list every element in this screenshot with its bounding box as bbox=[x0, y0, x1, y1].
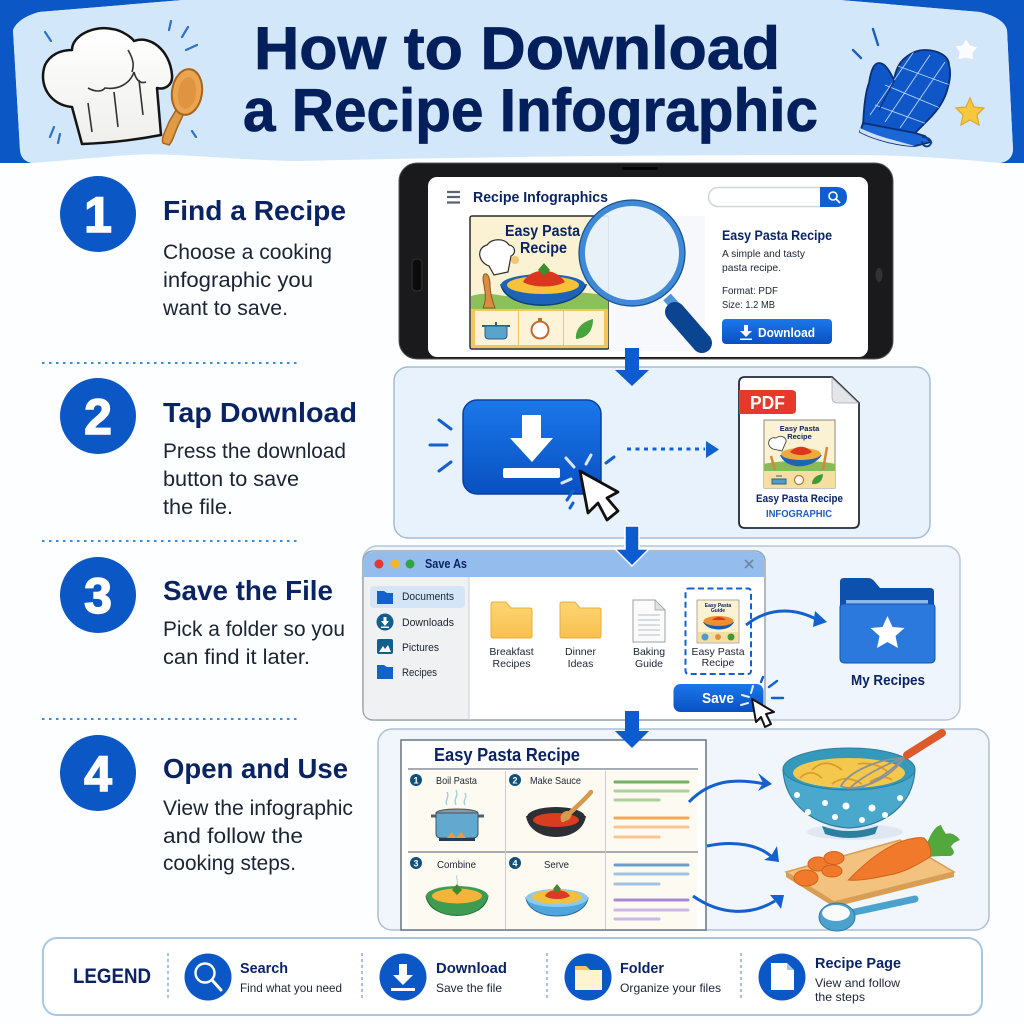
cell: serve: Serve bbox=[544, 859, 569, 871]
arrow to bowl bbox=[689, 773, 772, 802]
step 2 text: the file. bbox=[163, 496, 233, 519]
recipe sheet bbox=[401, 740, 706, 930]
cell: combine bbox=[410, 857, 488, 916]
folder: dinner ideas: Dinner bbox=[565, 646, 596, 658]
curved arrow bbox=[746, 611, 827, 627]
save button bbox=[674, 684, 764, 712]
file: baking guide: Guide bbox=[635, 658, 663, 670]
legend: LEGEND bbox=[73, 965, 151, 988]
icon: cursor bbox=[580, 471, 618, 520]
recipe details: pasta recipe. bbox=[722, 262, 781, 274]
icon: chef hat and spoon bbox=[43, 21, 205, 145]
legend: search bbox=[184, 954, 342, 1000]
dotted arrow bbox=[627, 441, 719, 458]
step 4 text: 4 bbox=[84, 746, 112, 802]
folder: dinner ideas: Ideas bbox=[568, 658, 593, 670]
step 2 text: Press the download bbox=[163, 440, 346, 463]
mini infographic: Recipe bbox=[787, 432, 812, 441]
selected file: easy pasta recipe: Recipe bbox=[702, 657, 735, 669]
legend: download bbox=[380, 954, 507, 1000]
sidebar bbox=[370, 586, 465, 679]
legend: recipe page bbox=[758, 954, 901, 1004]
panel: tap download bbox=[394, 367, 930, 538]
step 3 text bbox=[60, 557, 345, 669]
measuring spoon bbox=[819, 899, 915, 931]
click sparks bbox=[430, 420, 614, 508]
title: a Recipe Infographic bbox=[243, 77, 818, 144]
folder: dinner ideas bbox=[560, 602, 601, 670]
click sparks bbox=[761, 677, 783, 698]
legend: download: Save the file bbox=[436, 981, 502, 995]
icon: menu bbox=[447, 192, 460, 202]
step 3 text: Pick a folder so you bbox=[163, 618, 345, 641]
title: How to Download bbox=[254, 15, 780, 82]
legend: search: Find what you need bbox=[240, 981, 342, 995]
legend: folder bbox=[564, 954, 721, 1000]
step 4 text bbox=[60, 735, 353, 875]
recipe details: Format: PDF bbox=[722, 285, 778, 297]
legend: search: Search bbox=[240, 960, 288, 977]
step 1 text: 1 bbox=[84, 187, 112, 243]
download button: Download bbox=[758, 325, 815, 340]
icon: magnifying glass bbox=[579, 200, 705, 351]
folder: breakfast recipes: Breakfast bbox=[489, 646, 534, 658]
arrow to spoon bbox=[693, 895, 784, 911]
folder: my recipes: My Recipes bbox=[851, 673, 925, 689]
recipe details: Size: 1.2 MB bbox=[722, 299, 775, 311]
step 3 text: can find it later. bbox=[163, 646, 310, 669]
sidebar: Documents bbox=[402, 591, 454, 603]
cutting board with carrot bbox=[786, 825, 960, 907]
legend: recipe page: Recipe Page bbox=[815, 955, 901, 972]
step 4 text: View the infographic bbox=[163, 797, 353, 820]
pdf file bbox=[739, 377, 859, 528]
folder: my recipes bbox=[840, 578, 935, 689]
legend: recipe page: the steps bbox=[815, 990, 865, 1004]
legend: download: Download bbox=[436, 960, 507, 977]
sidebar: Downloads bbox=[402, 617, 454, 629]
recipe thumbnail: Easy Pasta bbox=[505, 223, 580, 240]
step 4 text: cooking steps. bbox=[163, 852, 296, 875]
recipe details bbox=[722, 228, 832, 311]
legend bbox=[43, 938, 982, 1015]
selected file: easy pasta recipe: Easy Pasta bbox=[691, 646, 745, 658]
pdf file: INFOGRAPHIC bbox=[766, 509, 832, 520]
download button large bbox=[463, 400, 601, 494]
cell: make sauce: Make Sauce bbox=[530, 775, 581, 787]
selected file: easy pasta recipe: Guide bbox=[711, 608, 725, 614]
page title: Recipe Infographics bbox=[473, 190, 608, 206]
arrow to carrot bbox=[707, 843, 779, 862]
save dialog window: Save As bbox=[425, 557, 467, 571]
file: baking guide: Baking bbox=[633, 646, 665, 658]
cell: combine: 3 bbox=[413, 858, 419, 868]
legend: recipe page: View and follow bbox=[815, 976, 900, 990]
save dialog window bbox=[363, 551, 765, 720]
step 1 text bbox=[60, 176, 346, 320]
recipe thumbnail bbox=[470, 216, 609, 349]
file: baking guide bbox=[633, 600, 665, 670]
step 1 text: want to save. bbox=[162, 297, 288, 320]
cell: boil pasta: 1 bbox=[413, 776, 419, 786]
sidebar: Recipes bbox=[402, 667, 437, 679]
recipe sheet: Easy Pasta Recipe bbox=[434, 745, 580, 765]
selected file: easy pasta recipe bbox=[686, 588, 751, 674]
recipe details: Easy Pasta Recipe bbox=[722, 228, 832, 243]
icon: oven mitt and stars bbox=[853, 29, 984, 146]
step 2 text: Tap Download bbox=[163, 397, 357, 428]
step 3 text: Save the File bbox=[163, 575, 333, 606]
search bar bbox=[708, 187, 847, 207]
instruction lines bbox=[615, 782, 688, 919]
pdf badge: PDF bbox=[750, 393, 785, 413]
panel: open and use bbox=[378, 729, 989, 931]
title bbox=[243, 15, 818, 144]
pdf badge bbox=[739, 390, 796, 414]
cell: combine: Combine bbox=[437, 859, 476, 871]
mini infographic: Easy Pasta bbox=[780, 424, 820, 433]
step 3 text: 3 bbox=[84, 568, 112, 624]
mini infographic bbox=[764, 420, 835, 488]
selected file: easy pasta recipe: Easy Pasta bbox=[705, 603, 731, 609]
pdf file: Easy Pasta Recipe bbox=[756, 493, 843, 505]
step 1 text: infographic you bbox=[163, 269, 313, 292]
flow arrows between panels bbox=[615, 348, 649, 748]
cell: serve: 4 bbox=[512, 858, 518, 868]
header banner bbox=[0, 0, 1024, 163]
recipe thumbnail: Recipe bbox=[520, 240, 567, 257]
download button bbox=[722, 319, 832, 344]
legend: folder: Folder bbox=[620, 960, 664, 977]
step 1 text: Find a Recipe bbox=[163, 195, 346, 226]
step 2 text: button to save bbox=[163, 468, 299, 491]
folder: breakfast recipes bbox=[489, 602, 534, 670]
cell: make sauce bbox=[509, 774, 591, 837]
cell: serve bbox=[509, 857, 588, 916]
step 2 text bbox=[60, 378, 357, 519]
icon: cursor bbox=[752, 699, 774, 727]
legend: folder: Organize your files bbox=[620, 981, 721, 995]
cell: boil pasta: Boil Pasta bbox=[436, 775, 477, 787]
step 2 text: 2 bbox=[84, 389, 112, 445]
panel: phone recipe page bbox=[399, 163, 893, 359]
panel: save the file bbox=[363, 546, 960, 727]
step 1 text: Choose a cooking bbox=[163, 241, 332, 264]
save button: Save bbox=[702, 690, 734, 707]
folder: breakfast recipes: Recipes bbox=[493, 658, 530, 670]
recipe details: A simple and tasty bbox=[722, 248, 806, 260]
sidebar: Pictures bbox=[402, 642, 439, 654]
cell: boil pasta bbox=[410, 774, 484, 841]
blue mixing bowl with whisk bbox=[783, 733, 942, 840]
cell: make sauce: 2 bbox=[512, 776, 518, 786]
step 4 text: Open and Use bbox=[163, 753, 348, 784]
step 4 text: and follow the bbox=[163, 825, 303, 848]
